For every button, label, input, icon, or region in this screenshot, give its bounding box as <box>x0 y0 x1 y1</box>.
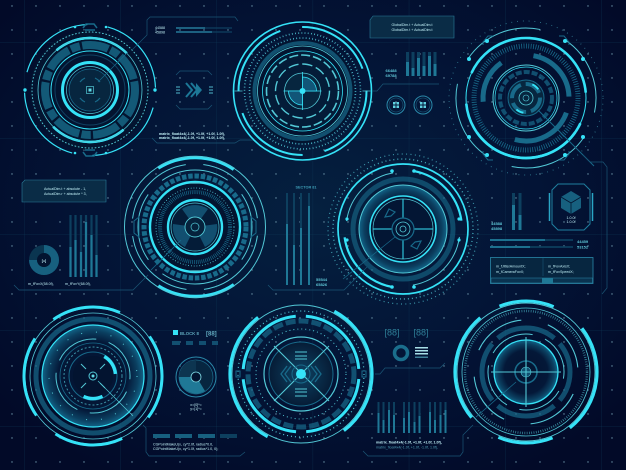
label block 8: [88] <box>206 332 217 338</box>
panel: actual dim <box>22 180 106 202</box>
circle 3: top-right radar <box>429 1 623 195</box>
icon: cube in hexagon: 1.0.0f <box>566 220 576 224</box>
callout: matrix text <box>152 132 253 143</box>
label block 8 <box>172 330 218 345</box>
callout: matrix text: matrix_float4x4(-1.0f, +1.0f, +1.0f, 1.0f), <box>159 132 225 136</box>
callout: fov labels: m_fFovX(58.0f), <box>28 282 54 286</box>
bar chart: top center <box>373 52 439 91</box>
label brackets and donut: [88] <box>413 328 429 338</box>
bar chart: three groups <box>378 402 446 433</box>
callout: top readout: 44588 <box>155 26 165 30</box>
bar chart: mid left <box>70 215 96 277</box>
circle 5: middle-center radar <box>328 154 478 304</box>
circle 2: top-center radar <box>234 22 372 160</box>
bar chart: horizontal progress <box>490 239 589 250</box>
gauge: small dial <box>176 357 216 411</box>
callout: matrix text lower: matrix_float4x4(-1.0f, +1.0f, -1.0f, 1.0f), <box>376 446 438 450</box>
chart: donut: [=] <box>42 259 46 263</box>
chart: donut <box>29 245 59 275</box>
panel: camera settings: m_fFovSpeedX; <box>548 270 574 274</box>
callout: fov labels <box>14 275 148 290</box>
bar chart: horizontal progress: 53152 <box>577 244 589 250</box>
panel: camera settings: m_fJitterAmountX; <box>496 264 526 268</box>
panel: global dim <box>370 16 454 38</box>
circle 4: middle-left radar <box>99 131 291 323</box>
panel: CGPoint text: CGPointMakeU(x, cy*2.0f, radius*0.0, <box>153 442 213 446</box>
panel: right readouts <box>491 155 607 294</box>
circle 1: top-left radar <box>9 9 171 171</box>
icon: chevrons panel <box>176 71 213 109</box>
callout: fov labels: m_fFovY(68.0f), <box>65 282 91 286</box>
bar chart: top center: 66488 <box>386 68 397 73</box>
panel: global dim: GlobalDim.t + ActualDim.t <box>391 28 433 32</box>
bar chart: top center: 69788 <box>386 73 397 78</box>
panel: right readouts: 44588 <box>491 221 503 226</box>
panel: global dim: GlobalDim.t + ActualDim.t <box>391 23 433 27</box>
bar chart: sector 81 <box>268 186 367 290</box>
panel: camera settings <box>490 258 593 284</box>
label brackets and donut <box>375 328 445 374</box>
panel: camera settings: m_fCameraFovX; <box>496 270 524 274</box>
panel: right readouts: 45898 <box>491 226 503 231</box>
panel: actual dim: ActualDim.r + absolute * 3, <box>44 192 87 196</box>
panel: actual dim: ActualDim.t + absolute - 1, <box>44 187 86 191</box>
panel: CGPoint text <box>143 425 245 456</box>
callout: top readout: 45898 <box>155 30 165 34</box>
circle 7: bottom-center radar <box>205 278 397 470</box>
bar chart: sector 81: SECTOR 81 <box>295 186 317 190</box>
label block 8: BLOCK 8 <box>180 331 199 336</box>
callout: top readout <box>132 17 238 50</box>
gauge: small dial: x=[0]*= <box>190 403 202 407</box>
icon: two round buttons <box>387 96 432 114</box>
gauge: small dial: y=[1]*= <box>190 407 202 411</box>
circle 6: bottom-left radar <box>0 280 189 470</box>
callout: matrix text lower <box>363 425 473 456</box>
icon: cube in hexagon <box>550 184 592 230</box>
panel: CGPoint text: CGPointMakeU(x, cy*1.0f, radius*1.0, 0); <box>153 447 218 451</box>
bar chart: sector 81: 55544 <box>316 277 328 282</box>
panel: camera settings: m_fFovAxisX; <box>548 264 570 268</box>
label brackets and donut: [88] <box>384 328 400 338</box>
bar chart: horizontal progress: 44459 <box>577 239 589 244</box>
icon: cube in hexagon: 1.0.0f <box>566 216 576 220</box>
callout: matrix text lower: matrix_float4x4(-1.0f, +1.0f, +1.0f, 1.0f), <box>376 440 442 444</box>
circle 8: bottom-right radar <box>426 272 626 470</box>
callout: matrix text: matrix_float4x4(-1.0f, +1.0f, +1.0f, 1.0f), <box>159 136 225 140</box>
bar chart: sector 81: 65826 <box>316 282 328 287</box>
